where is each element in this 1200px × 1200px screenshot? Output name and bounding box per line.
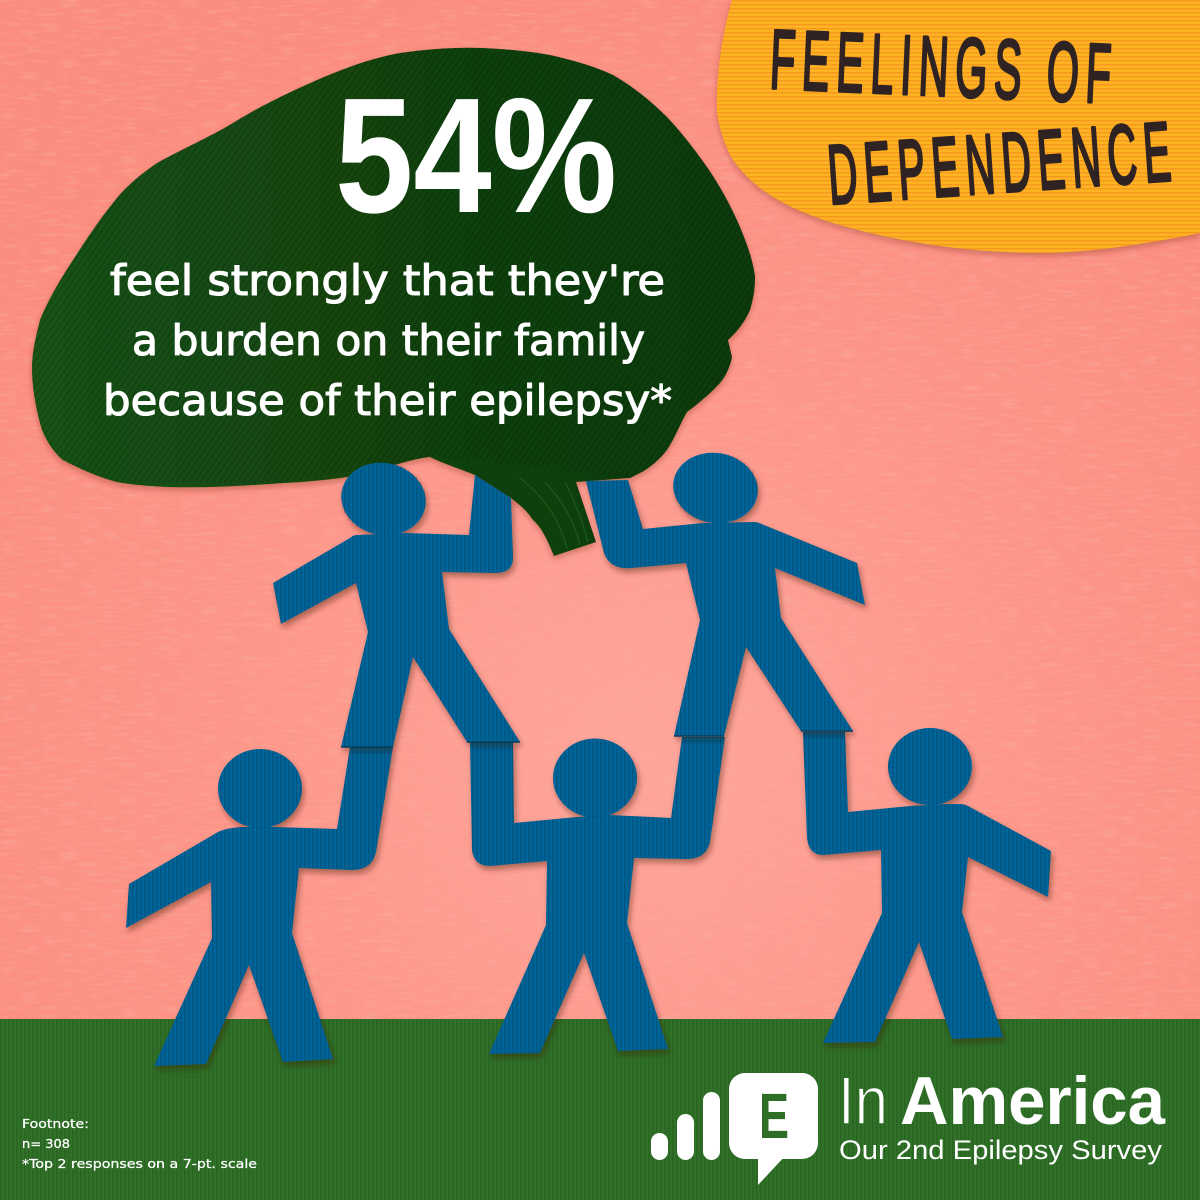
icon: speech bubble: E bbox=[759, 1080, 789, 1152]
wordmark: In bbox=[838, 1063, 888, 1139]
footnote: n= 308 bbox=[22, 1137, 70, 1151]
tag shape bbox=[717, 0, 1200, 253]
icon: speech bubble bbox=[729, 1073, 818, 1185]
callout: dark green brain-shaped speech shape bbox=[32, 48, 755, 556]
body bbox=[803, 732, 1051, 1043]
head bbox=[218, 749, 302, 828]
figure: top left person bbox=[273, 455, 520, 747]
title bbox=[768, 12, 1180, 222]
head bbox=[553, 738, 637, 818]
figure texture overlay bbox=[126, 453, 1051, 1066]
logo: InAmerica bbox=[651, 1063, 1166, 1185]
statement text: because of their epilepsy* bbox=[103, 376, 672, 425]
statistic: 54%: 54% bbox=[335, 64, 617, 247]
figure: bottom middle person bbox=[470, 737, 725, 1054]
figure: top right person bbox=[586, 446, 865, 736]
brain shape bbox=[32, 48, 755, 556]
body bbox=[470, 737, 725, 1054]
body bbox=[273, 475, 520, 747]
footnote bbox=[22, 1117, 257, 1171]
head bbox=[888, 728, 972, 805]
tag texture bbox=[717, 0, 1200, 253]
statement text bbox=[103, 256, 672, 425]
body bbox=[126, 747, 393, 1066]
wordmark: America bbox=[900, 1063, 1166, 1139]
panel: yellow title tag bbox=[717, 0, 1200, 253]
wordmark: Our 2nd Epilepsy Survey bbox=[839, 1135, 1163, 1165]
footnote: *Top 2 responses on a 7-pt. scale bbox=[22, 1157, 257, 1171]
head bbox=[668, 446, 763, 530]
brain stem streaks bbox=[520, 478, 588, 549]
wordmark bbox=[838, 1063, 1166, 1165]
footnote: Footnote: bbox=[22, 1117, 89, 1131]
figure: bottom left person bbox=[126, 747, 393, 1066]
ground: green paper strip bbox=[0, 1019, 1200, 1200]
figure: bottom right person bbox=[803, 728, 1051, 1043]
statement text: a burden on their family bbox=[132, 316, 645, 365]
icon: signal bars bbox=[651, 1092, 720, 1160]
head bbox=[334, 455, 433, 543]
body bbox=[586, 480, 865, 736]
brain texture bbox=[32, 48, 755, 483]
statement text: feel strongly that they're bbox=[110, 256, 665, 305]
